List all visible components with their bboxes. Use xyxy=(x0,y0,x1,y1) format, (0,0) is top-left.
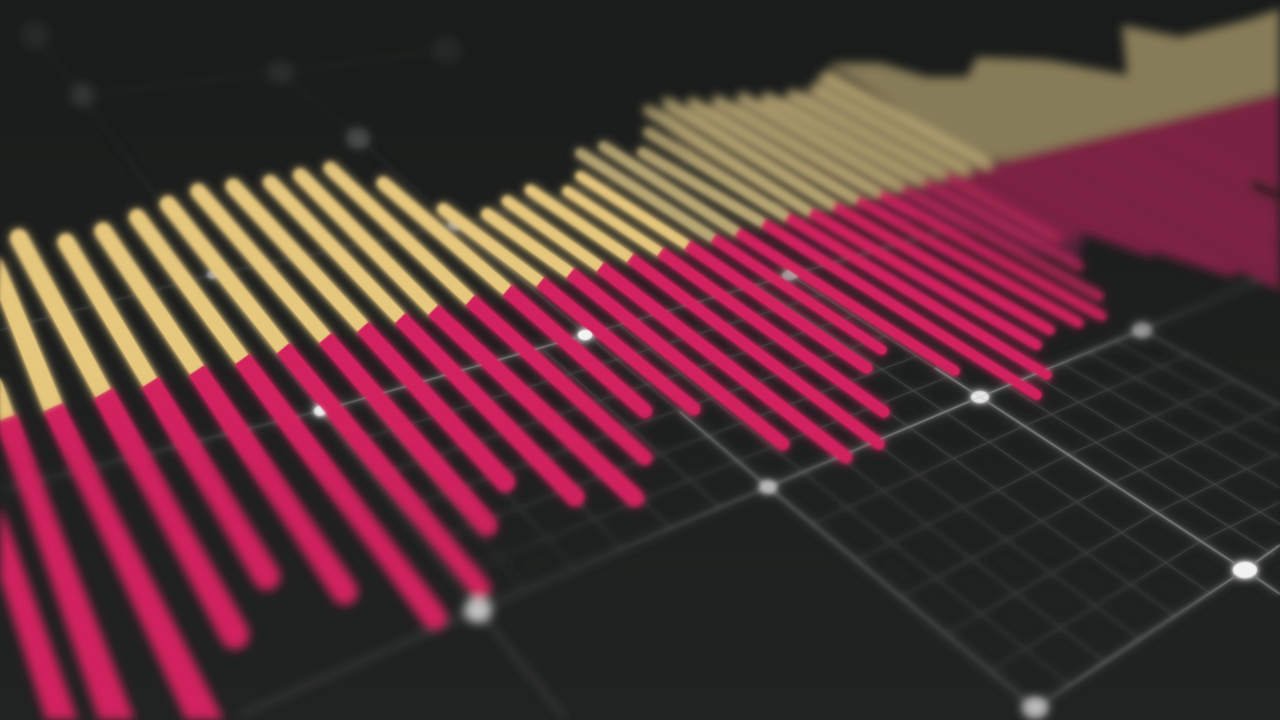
far pink bar mass xyxy=(945,93,1280,291)
dark notch in pink mass xyxy=(1252,182,1280,195)
faint far pink stripes xyxy=(985,126,1280,275)
fine subgrid lines xyxy=(346,285,1280,685)
far dimmer pink bars xyxy=(902,176,1099,296)
tan underlay between far bars xyxy=(650,63,1013,210)
clipped left-edge yellow bar xyxy=(0,256,62,411)
tapered near pink bars xyxy=(0,305,641,720)
middle pink bars xyxy=(470,290,645,458)
rounded ends of near pink bars xyxy=(220,472,644,650)
yellow bar segments xyxy=(0,78,987,421)
pink underlay between far bars xyxy=(850,160,1085,262)
duller distant yellow bars xyxy=(580,78,987,238)
sharp focus layer xyxy=(0,219,1280,614)
rounded ends of pink bars xyxy=(638,411,652,458)
pink bar segments xyxy=(0,176,1102,720)
far tan bar mass xyxy=(833,9,1280,160)
